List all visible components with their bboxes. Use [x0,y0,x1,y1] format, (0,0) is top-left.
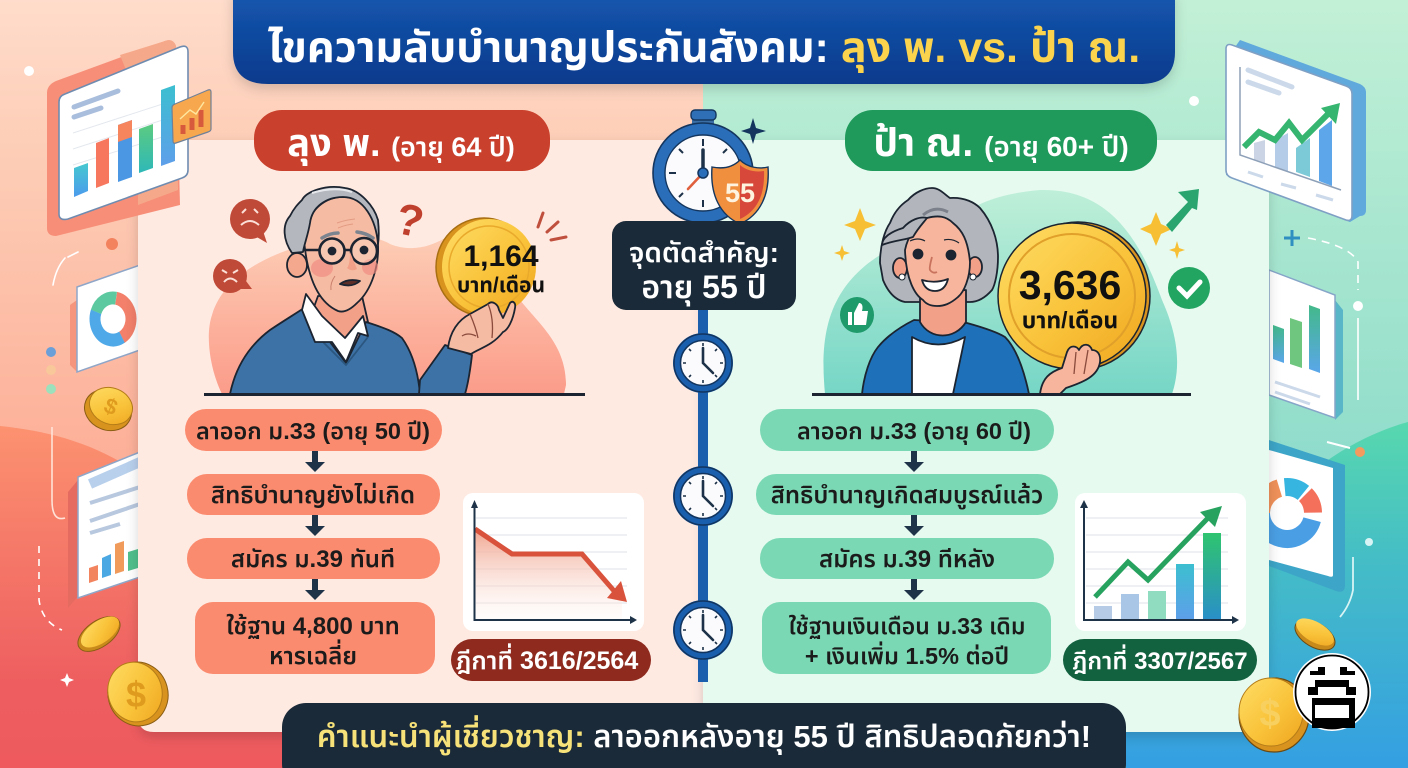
step: right 1: ลาออก ม.33 (อายุ 60 ปี) [797,418,1031,445]
coin: bottom right: $ [1259,693,1281,735]
arrow: right 1 to 2 [904,451,924,472]
coin: 3,636: 3,636 [1019,262,1121,308]
step: left 1 [185,409,442,451]
step: left 4 [195,602,435,674]
step: left 3 [187,538,440,579]
decorative: left dots and dashes [24,66,118,687]
badge: ruling 3307/2567: ฎีกาที่ 3307/2567 [1072,644,1248,675]
step: right 1 [760,409,1054,451]
title text: ไขความลับบำนาญประกันสังคม: ลุง พ. vs. ป้า ณ. [268,24,1140,73]
decorative: right small coin [1290,613,1340,656]
blob: right illustration backdrop [824,190,1177,394]
coin: 3,636: บาท/เดือน [1022,307,1118,333]
illustration: aunt hand holding coin [1040,345,1100,394]
decorative: left chart tablet [47,40,211,236]
logo: corner badge [1293,653,1371,731]
step: right 2: สิทธิบำนาญเกิดสมบูรณ์แล้ว [771,481,1043,510]
step: left 4: ใช้ฐาน 4,800 บาท [226,612,400,640]
flow: aunt N [756,409,1058,674]
arrow: left 3 to 4 [305,579,325,600]
icon: stopwatch with shield: 55 [725,178,755,208]
coin: 1,164: 1,164 [463,240,539,273]
step: left 4: หารเฉลี่ย [269,639,357,670]
coin: 1,164: บาท/เดือน [457,274,545,297]
coin: bottom left [101,655,175,733]
callout: key cut-off age 55 [612,221,796,310]
arrow: right 2 to 3 [904,515,924,536]
title banner [233,0,1175,84]
decorative: right dots and dashes [1189,96,1373,617]
decorative: right donut card [1250,440,1345,592]
flow: uncle P [185,409,442,674]
step: right 4: + เงินเพิ่ม 1.5% ต่อปี [805,640,1009,669]
decorative: left coins: $ [100,393,121,420]
heading: left person pill [254,110,550,171]
blob: left illustration backdrop [209,235,566,394]
panel: right background [703,140,1269,732]
step: right 3 [760,538,1054,579]
advice banner: คำแนะนำผู้เชี่ยวชาญ: ลาออกหลังอายุ 55 ปี สิทธิปลอดภัยกว่า! [317,715,1091,755]
step: left 1: ลาออก ม.33 (อายุ 50 ปี) [196,418,430,445]
icon: question mark: ? [392,194,428,248]
chart: declining line [463,493,644,631]
chart: rising bars and line [1075,493,1246,631]
panel: left background [138,140,703,732]
heading: right person pill [845,110,1157,171]
step: right 4: ใช้ฐานเงินเดือน ม.33 เดิม [789,613,1025,639]
step: left 3: สมัคร ม.39 ทันที [231,546,395,573]
illustration: uncle P [230,187,472,394]
step: right 2 [756,474,1058,515]
decorative: right chart tablet [1226,40,1366,222]
icon: coin sparks [538,213,566,240]
badge: ruling 3307/2567 [1063,639,1257,681]
icon: timeline clock 3 [673,600,733,660]
icon: timeline clock 2 [673,466,733,526]
callout: key cut-off age 55: อายุ 55 ปี [641,269,767,306]
icon: timeline clock 1 [673,333,733,393]
icon: stopwatch with shield [653,110,768,224]
coin: bottom left: $ [126,674,146,715]
background: left half [0,0,703,768]
callout: key cut-off age 55: จุดตัดสำคัญ: [629,237,779,269]
arrow: left 1 to 2 [305,451,325,472]
decorative: left document card [68,452,140,608]
icon: check badge [1168,267,1210,309]
illustration: aunt N [862,188,1029,394]
coin: bottom right [1239,678,1309,752]
badge: ruling 3616/2564 [451,639,651,681]
ground line: right [812,393,1191,396]
coin: 1,164 [436,218,545,316]
step: right 4 [762,602,1051,674]
step: left 2: สิทธิบำนาญยังไม่เกิด [211,481,415,509]
decorative: left donut card [70,265,140,372]
advice banner [282,703,1126,768]
icon: rising arrow [1166,189,1199,232]
heading: left person pill: ลุง พ. (อายุ 64 ปี) [287,123,515,166]
icon: worried speech bubbles [213,199,270,293]
arrow: right 3 to 4 [904,579,924,600]
background: right half [703,0,1408,768]
icon: thumbs up badge [840,297,874,333]
ground line: left [204,393,585,396]
step: right 3: สมัคร ม.39 ทีหลัง [819,546,995,573]
heading: right person pill: ป้า ณ. (อายุ 60+ ปี) [873,122,1129,165]
coin: 3,636 [998,222,1150,370]
illustration: uncle hand holding coin [448,302,515,354]
badge: ruling 3616/2564: ฎีกาที่ 3616/2564 [456,643,638,675]
decorative: right bar card [1269,270,1343,420]
decorative: left coins [72,381,138,658]
arrow: left 2 to 3 [305,515,325,536]
timeline bar [698,300,708,682]
step: left 2 [187,474,440,515]
icon: sparkles [834,208,1185,261]
